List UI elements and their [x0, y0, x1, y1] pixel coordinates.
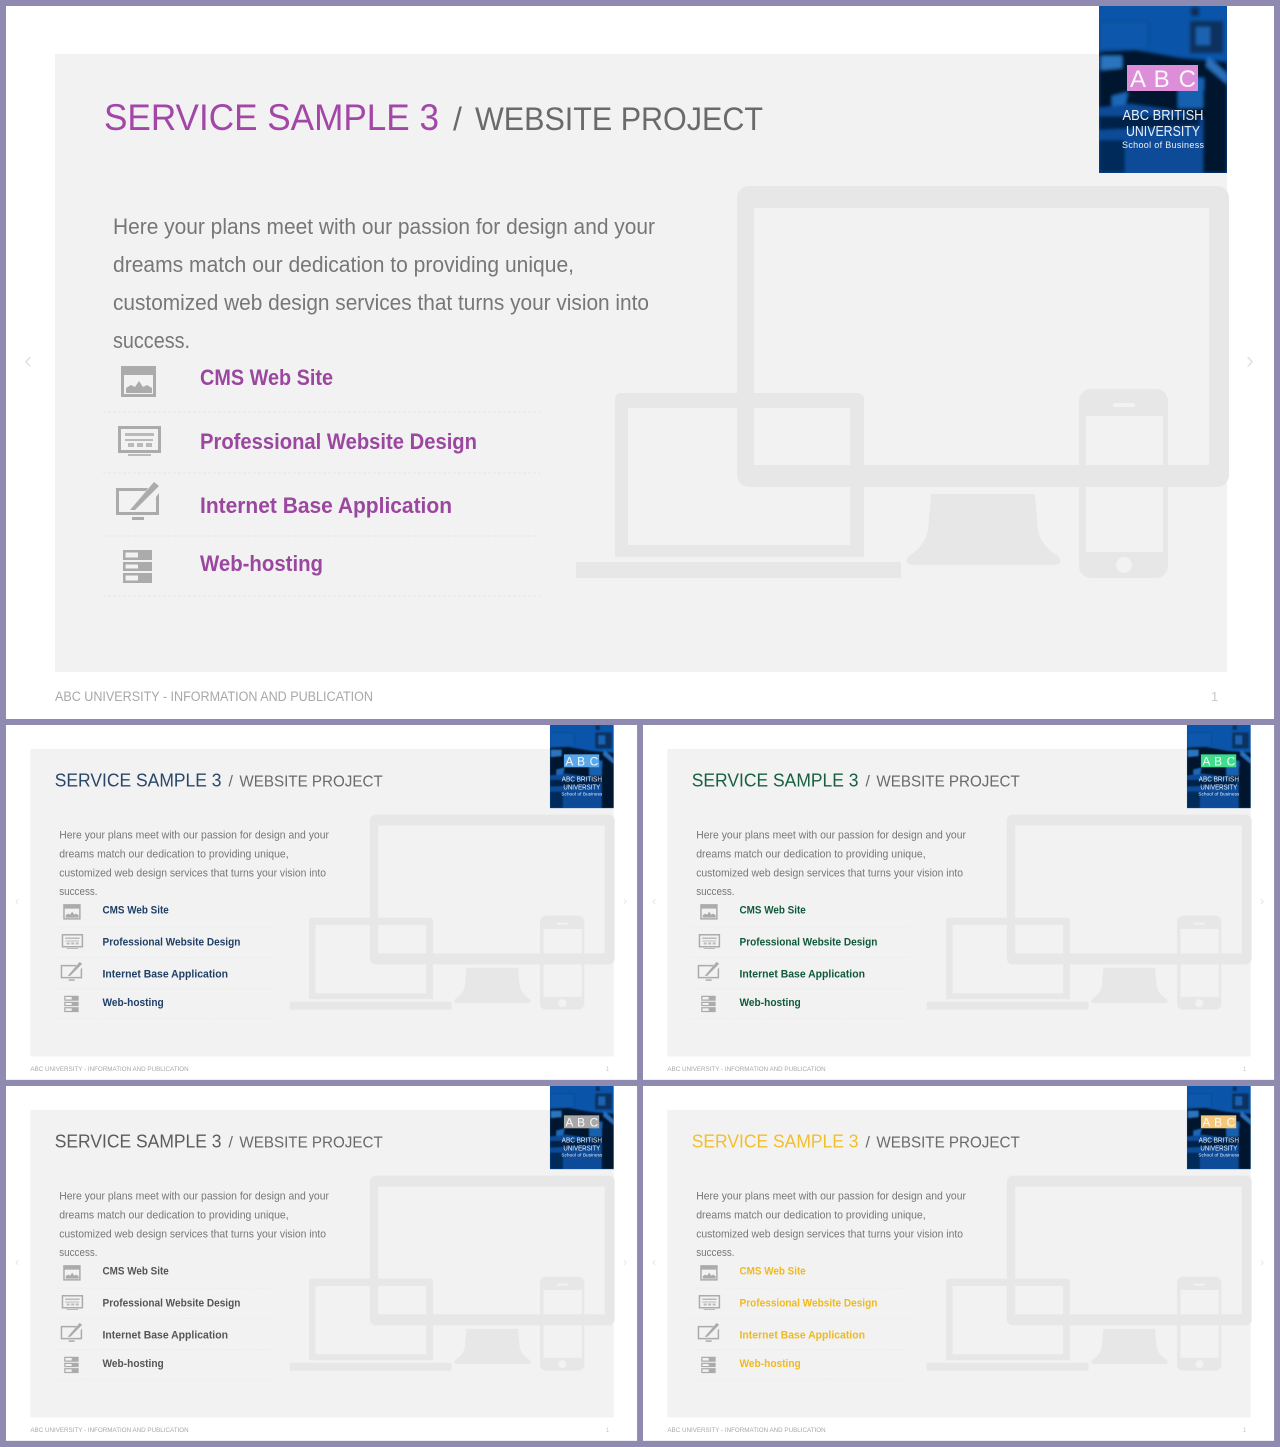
title: yellow: /: [865, 1135, 870, 1152]
navigation arrows: [24, 347, 1254, 374]
intro paragraph: yellow slide: customized web design services that turns your vision into: [696, 1228, 963, 1240]
footer: green slide: 1: [1243, 1066, 1247, 1073]
footer: navy slide: [30, 1066, 610, 1073]
service list: yellow: Web-hosting: [740, 1358, 801, 1370]
service list: yellow: Professional Website Design: [740, 1297, 877, 1309]
intro paragraph: grey slide: Here your plans meet with our passion for design and your: [59, 1190, 329, 1202]
title: green: WEBSITE PROJECT: [876, 774, 1020, 791]
footer: grey slide: [30, 1427, 610, 1434]
service list: grey: Professional Website Design: [103, 1297, 240, 1309]
service list: grey: CMS Web Site: [103, 1266, 169, 1278]
intro paragraph: Here your plans meet with our passion for design and your: [113, 214, 655, 239]
title: grey: /: [228, 1135, 233, 1152]
logo: ABC British University: School of Business: [1122, 140, 1204, 150]
service list: navy: Professional Website Design: [103, 936, 240, 948]
intro paragraph: navy slide: success.: [59, 886, 98, 898]
service list: grey: [103, 1266, 240, 1370]
intro paragraph: green slide: dreams match our dedication to providing unique,: [696, 848, 926, 860]
service list: Professional Website Design: [200, 429, 477, 454]
panel: grey slide: [6, 1086, 637, 1441]
logo: green variant: UNIVERSITY: [1200, 783, 1237, 792]
footer: [55, 689, 1218, 704]
service list: green: Professional Website Design: [740, 936, 877, 948]
intro paragraph: yellow slide: [696, 1190, 966, 1259]
service list: navy: [103, 905, 240, 1009]
logo: yellow variant: School of Business: [1198, 1153, 1240, 1158]
title: yellow: WEBSITE PROJECT: [876, 1135, 1020, 1152]
title: yellow: SERVICE SAMPLE 3: [692, 1131, 858, 1152]
logo: green variant: ABC BRITISH: [1199, 775, 1239, 784]
logo: grey variant: UNIVERSITY: [563, 1144, 600, 1153]
panel: grey slide: ›: [623, 1255, 627, 1269]
title: green: SERVICE SAMPLE 3: [692, 770, 858, 791]
intro paragraph: navy slide: customized web design services that turns your vision into: [59, 867, 326, 879]
intro paragraph: navy slide: Here your plans meet with our passion for design and your: [59, 829, 329, 841]
icons: service list: [116, 366, 161, 583]
intro paragraph: navy slide: [59, 829, 329, 898]
panel: yellow slide: ‹: [652, 1255, 656, 1269]
service list: grey: Web-hosting: [103, 1358, 164, 1370]
title: navy: [55, 770, 383, 791]
panel: navy slide: [6, 725, 637, 1080]
logo: navy variant: ABC BRITISH: [562, 775, 602, 784]
panel: yellow slide: ›: [1260, 1255, 1264, 1269]
footer: navy slide: ABC UNIVERSITY - INFORMATION AND PUBLICATION: [30, 1066, 189, 1073]
intro paragraph: customized web design services that turns your vision into: [113, 290, 649, 315]
intro paragraph: grey slide: dreams match our dedication to providing unique,: [59, 1209, 289, 1221]
logo: yellow variant: ABC BRITISH: [1199, 1136, 1239, 1145]
title: grey: [55, 1131, 383, 1152]
service list: green: Web-hosting: [740, 997, 801, 1009]
intro paragraph: [113, 214, 655, 353]
footer: grey slide: 1: [606, 1427, 610, 1434]
service list: yellow: CMS Web Site: [740, 1266, 806, 1278]
logo: green variant: A B C: [1202, 754, 1236, 768]
footer: green slide: ABC UNIVERSITY - INFORMATION AND PUBLICATION: [667, 1066, 826, 1073]
title: navy: /: [228, 774, 233, 791]
service list: yellow: Internet Base Application: [740, 1329, 865, 1341]
footer: yellow slide: 1: [1243, 1427, 1247, 1434]
logo: grey variant: School of Business: [561, 1153, 603, 1158]
panel: grey slide: ‹: [15, 1255, 19, 1269]
footer: grey slide: ABC UNIVERSITY - INFORMATION AND PUBLICATION: [30, 1427, 189, 1434]
logo: navy variant: School of Business: [561, 792, 603, 797]
service list: [200, 365, 477, 576]
logo: ABC British University: UNIVERSITY: [1126, 124, 1200, 140]
navigation arrows: ›: [1246, 347, 1254, 374]
panel: navy slide: ›: [623, 894, 627, 908]
title: grey: SERVICE SAMPLE 3: [55, 1131, 221, 1152]
logo: yellow variant: A B C: [1202, 1115, 1236, 1129]
intro paragraph: green slide: customized web design services that turns your vision into: [696, 867, 963, 879]
service list: navy: CMS Web Site: [103, 905, 169, 917]
logo: green variant: School of Business: [1198, 792, 1240, 797]
title: grey: WEBSITE PROJECT: [239, 1135, 383, 1152]
panel: large purple slide: [6, 6, 1274, 719]
intro paragraph: green slide: [696, 829, 966, 898]
title: [104, 97, 763, 138]
service list: Web-hosting: [200, 551, 323, 576]
intro paragraph: yellow slide: dreams match our dedication to providing unique,: [696, 1209, 926, 1221]
logo: yellow variant: UNIVERSITY: [1200, 1144, 1237, 1153]
illustration: devices: [576, 186, 1229, 578]
intro paragraph: yellow slide: Here your plans meet with our passion for design and your: [696, 1190, 966, 1202]
title: navy: SERVICE SAMPLE 3: [55, 770, 221, 791]
title: SERVICE SAMPLE 3: [104, 97, 439, 138]
logo: grey variant: ABC BRITISH: [562, 1136, 602, 1145]
logo: ABC British University: [1099, 6, 1227, 173]
intro paragraph: dreams match our dedication to providing unique,: [113, 252, 574, 277]
logo: navy variant: [550, 725, 614, 808]
footer: yellow slide: [667, 1427, 1247, 1434]
panel: green slide: ›: [1260, 894, 1264, 908]
service list: CMS Web Site: [200, 365, 333, 390]
service list: yellow: [740, 1266, 877, 1370]
logo: grey variant: A B C: [565, 1115, 599, 1129]
service list: green: CMS Web Site: [740, 905, 806, 917]
service list: navy: Web-hosting: [103, 997, 164, 1009]
intro paragraph: green slide: success.: [696, 886, 735, 898]
intro paragraph: grey slide: [59, 1190, 329, 1259]
intro paragraph: grey slide: customized web design services that turns your vision into: [59, 1228, 326, 1240]
intro paragraph: navy slide: dreams match our dedication to providing unique,: [59, 848, 289, 860]
service list: grey: Internet Base Application: [103, 1329, 228, 1341]
logo: grey variant: [550, 1086, 614, 1169]
panel: green slide: [643, 725, 1274, 1080]
title: navy: WEBSITE PROJECT: [239, 774, 383, 791]
service list: green: [740, 905, 877, 1009]
logo: ABC British University: ABC BRITISH: [1122, 108, 1204, 124]
intro paragraph: success.: [113, 328, 190, 353]
title: green: /: [865, 774, 870, 791]
title: green: [692, 770, 1020, 791]
footer: 1: [1211, 689, 1218, 704]
footer: navy slide: 1: [606, 1066, 610, 1073]
logo: navy variant: A B C: [565, 754, 599, 768]
navigation arrows: ‹: [24, 347, 32, 374]
title: /: [453, 101, 462, 137]
title: WEBSITE PROJECT: [475, 101, 763, 137]
footer: ABC UNIVERSITY - INFORMATION AND PUBLICATION: [55, 689, 373, 704]
panel: green slide: ‹: [652, 894, 656, 908]
logo: ABC British University: A B C: [1130, 66, 1196, 93]
logo: navy variant: UNIVERSITY: [563, 783, 600, 792]
logo: green variant: [1187, 725, 1251, 808]
service list: green: Internet Base Application: [740, 968, 865, 980]
footer: yellow slide: ABC UNIVERSITY - INFORMATION AND PUBLICATION: [667, 1427, 826, 1434]
service list: Internet Base Application: [200, 493, 452, 518]
footer: green slide: [667, 1066, 1247, 1073]
logo: yellow variant: [1187, 1086, 1251, 1169]
panel: yellow slide: [643, 1086, 1274, 1441]
service list: navy: Internet Base Application: [103, 968, 228, 980]
intro paragraph: green slide: Here your plans meet with our passion for design and your: [696, 829, 966, 841]
intro paragraph: grey slide: success.: [59, 1247, 98, 1259]
panel: navy slide: ‹: [15, 894, 19, 908]
intro paragraph: yellow slide: success.: [696, 1247, 735, 1259]
title: yellow: [692, 1131, 1020, 1152]
